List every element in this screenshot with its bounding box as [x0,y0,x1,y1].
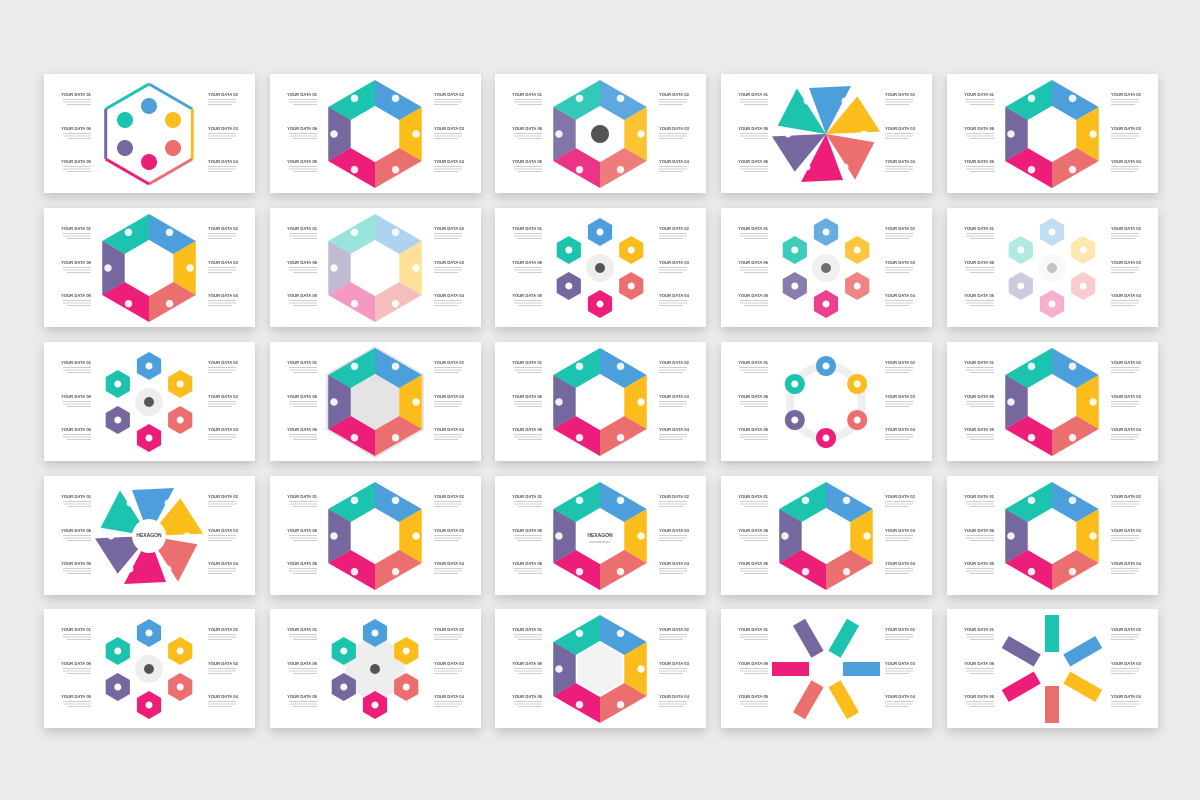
slide 19: hexagon ring [721,476,932,595]
slide 18: puzzle hexagon: HEXAGON [587,533,613,539]
slide 8: hexagon cells: YOUR DATA 01 [512,226,543,231]
slide 21: hexagon cells: YOUR DATA 01 [61,627,92,632]
slide 8: hexagon cells: YOUR DATA 03 [659,260,690,265]
slide 19: hexagon ring: YOUR DATA 04 [885,561,916,566]
slide 16: pinwheel hexagon title: YOUR DATA 02 [208,494,239,499]
slide 25: radiating tabs: YOUR DATA 03 [1111,661,1142,666]
slide 8: hexagon cells: YOUR DATA 04 [659,293,690,298]
slide 20: hexagon ring: YOUR DATA 01 [964,494,995,499]
slide 13: hexagon ring arrows: YOUR DATA 03 [659,394,690,399]
slide 3: split hexagon: YOUR DATA 03 [659,126,690,131]
slide 13: hexagon ring arrows [495,342,706,461]
slide 24: rounded bars: YOUR DATA 06 [738,661,769,666]
slide 7: brush hexagon: YOUR DATA 05 [287,293,318,298]
slide 25: radiating tabs: YOUR DATA 01 [964,627,995,632]
slide 7: brush hexagon: YOUR DATA 03 [434,260,465,265]
slide 3: split hexagon: YOUR DATA 02 [659,92,690,97]
slide 15: hexagon ring with arrows: YOUR DATA 05 [964,427,995,432]
slide 10: light hexagon cells [947,208,1158,327]
slide 5: hexagon ring: YOUR DATA 05 [964,159,995,164]
slide 13: hexagon ring arrows: YOUR DATA 06 [512,394,543,399]
slide 8: hexagon cells [495,208,706,327]
slide 23: solid hexagon triangles: YOUR DATA 05 [512,694,543,699]
slide 12: hexagon ring in gray frame: YOUR DATA 04 [434,427,465,432]
slide 9: hexagon with sample text: YOUR DATA 01 [738,226,769,231]
slide 19: hexagon ring: YOUR DATA 03 [885,528,916,533]
slide 10: light hexagon cells: YOUR DATA 06 [964,260,995,265]
slide 21: hexagon cells: YOUR DATA 02 [208,627,239,632]
slide 16: pinwheel hexagon title: YOUR DATA 01 [61,494,92,499]
slide 14: ring circles: YOUR DATA 03 [885,394,916,399]
slide 5: hexagon ring: YOUR DATA 01 [964,92,995,97]
slide 5: hexagon ring [947,74,1158,193]
slide 11: 3D hexagon cells: YOUR DATA 03 [208,394,239,399]
slide 10: light hexagon cells: YOUR DATA 05 [964,293,995,298]
slide 13: hexagon ring arrows: YOUR DATA 01 [512,360,543,365]
slide 3: split hexagon [495,74,706,193]
slide 25: radiating tabs: YOUR DATA 05 [964,694,995,699]
slide 19: hexagon ring: YOUR DATA 05 [738,561,769,566]
slide 23: solid hexagon triangles: YOUR DATA 06 [512,661,543,666]
slide 22: hexagon cells with gray center: YOUR DATA 01 [287,627,318,632]
slide 7: brush hexagon [270,208,481,327]
slide 17: ribbon hexagon [270,476,481,595]
slide 25: radiating tabs: YOUR DATA 06 [964,661,995,666]
slide 18: puzzle hexagon [495,476,706,595]
slide 21: hexagon cells: YOUR DATA 04 [208,694,239,699]
slide 14: ring circles: YOUR DATA 02 [885,360,916,365]
slide 25: radiating tabs: YOUR DATA 04 [1111,694,1142,699]
slide 3: split hexagon: YOUR DATA 01 [512,92,543,97]
slide 24: rounded bars: YOUR DATA 03 [885,661,916,666]
slide 4: pinwheel: YOUR DATA 02 [885,92,916,97]
slide 20: hexagon ring: YOUR DATA 06 [964,528,995,533]
slide 16: pinwheel hexagon title: YOUR DATA 05 [61,561,92,566]
slide 1: outline hexagon with circles: YOUR DATA 05 [61,159,92,164]
slide 20: hexagon ring: YOUR DATA 04 [1111,561,1142,566]
slide 4: pinwheel: YOUR DATA 03 [885,126,916,131]
slide 16: pinwheel hexagon title: YOUR DATA 04 [208,561,239,566]
slide 23: solid hexagon triangles: YOUR DATA 03 [659,661,690,666]
slide 24: rounded bars: YOUR DATA 01 [738,627,769,632]
slide 16: pinwheel hexagon title [44,476,255,595]
slide 18: puzzle hexagon: YOUR DATA 05 [512,561,543,566]
slide 22: hexagon cells with gray center [270,609,481,728]
slide 4: pinwheel: YOUR DATA 05 [738,159,769,164]
slide 16: pinwheel hexagon title: YOUR DATA 06 [61,528,92,533]
slide 6: hexagon ring [44,208,255,327]
slide 11: 3D hexagon cells: YOUR DATA 05 [61,427,92,432]
slide 22: hexagon cells with gray center: YOUR DATA 03 [434,661,465,666]
slide 24: rounded bars: YOUR DATA 02 [885,627,916,632]
slide 1: outline hexagon with circles: YOUR DATA 01 [61,92,92,97]
slide 23: solid hexagon triangles: YOUR DATA 04 [659,694,690,699]
slide 23: solid hexagon triangles: YOUR DATA 02 [659,627,690,632]
slide 23: solid hexagon triangles [495,609,706,728]
slide 14: ring circles: YOUR DATA 06 [738,394,769,399]
slide 14: ring circles [721,342,932,461]
slide 6: hexagon ring: YOUR DATA 03 [208,260,239,265]
slide 24: rounded bars: YOUR DATA 05 [738,694,769,699]
slide 6: hexagon ring: YOUR DATA 01 [61,226,92,231]
slide 11: 3D hexagon cells: YOUR DATA 02 [208,360,239,365]
slide 18: puzzle hexagon: INFOGRAPHIC [590,540,611,544]
slide 13: hexagon ring arrows: YOUR DATA 05 [512,427,543,432]
slide 9: hexagon with sample text: YOUR DATA 02 [885,226,916,231]
slide 4: pinwheel [721,74,932,193]
slide 8: hexagon cells: YOUR DATA 06 [512,260,543,265]
slide 12: hexagon ring in gray frame: YOUR DATA 02 [434,360,465,365]
slide 20: hexagon ring: YOUR DATA 03 [1111,528,1142,533]
slide 9: hexagon with sample text: YOUR DATA 05 [738,293,769,298]
slide 17: ribbon hexagon: YOUR DATA 02 [434,494,465,499]
slide 14: ring circles: YOUR DATA 05 [738,427,769,432]
slide 13: hexagon ring arrows: YOUR DATA 02 [659,360,690,365]
slide 17: ribbon hexagon: YOUR DATA 06 [287,528,318,533]
slide 15: hexagon ring with arrows: YOUR DATA 06 [964,394,995,399]
slide 18: puzzle hexagon: YOUR DATA 01 [512,494,543,499]
slide 19: hexagon ring: YOUR DATA 01 [738,494,769,499]
slide 1: outline hexagon with circles: YOUR DATA 06 [61,126,92,131]
slide 18: puzzle hexagon: YOUR DATA 02 [659,494,690,499]
slide 9: hexagon with sample text [721,208,932,327]
slide 15: hexagon ring with arrows: YOUR DATA 02 [1111,360,1142,365]
slide 11: 3D hexagon cells: YOUR DATA 01 [61,360,92,365]
slide 15: hexagon ring with arrows [947,342,1158,461]
slide 7: brush hexagon: YOUR DATA 04 [434,293,465,298]
slide 21: hexagon cells: YOUR DATA 03 [208,661,239,666]
slide 12: hexagon ring in gray frame [270,342,481,461]
slide 25: radiating tabs: YOUR DATA 02 [1111,627,1142,632]
slide 7: brush hexagon: YOUR DATA 02 [434,226,465,231]
slide 2: hexagon ring with icon circles: YOUR DATA 02 [434,92,465,97]
slide 2: hexagon ring with icon circles: YOUR DATA 04 [434,159,465,164]
slide 12: hexagon ring in gray frame: YOUR DATA 06 [287,394,318,399]
slide 6: hexagon ring: YOUR DATA 02 [208,226,239,231]
slide 2: hexagon ring with icon circles: YOUR DATA 01 [287,92,318,97]
slide 7: brush hexagon: YOUR DATA 06 [287,260,318,265]
slide 1: outline hexagon with circles: YOUR DATA 02 [208,92,239,97]
slide 1: outline hexagon with circles [44,74,255,193]
slide 25: radiating tabs [947,609,1158,728]
slide 2: hexagon ring with icon circles: YOUR DATA 05 [287,159,318,164]
slide 1: outline hexagon with circles: YOUR DATA 03 [208,126,239,131]
slide 17: ribbon hexagon: YOUR DATA 05 [287,561,318,566]
slide 2: hexagon ring with icon circles: YOUR DATA 03 [434,126,465,131]
slide 6: hexagon ring: YOUR DATA 05 [61,293,92,298]
slide 10: light hexagon cells: YOUR DATA 04 [1111,293,1142,298]
slide 12: hexagon ring in gray frame: YOUR DATA 03 [434,394,465,399]
slide 3: split hexagon: YOUR DATA 04 [659,159,690,164]
slide 5: hexagon ring: YOUR DATA 03 [1111,126,1142,131]
slide 4: pinwheel: YOUR DATA 01 [738,92,769,97]
slide 14: ring circles: YOUR DATA 04 [885,427,916,432]
slide 21: hexagon cells: YOUR DATA 05 [61,694,92,699]
slide 18: puzzle hexagon: YOUR DATA 04 [659,561,690,566]
slide 10: light hexagon cells: YOUR DATA 03 [1111,260,1142,265]
slide 21: hexagon cells [44,609,255,728]
slide 21: hexagon cells: YOUR DATA 06 [61,661,92,666]
slide 12: hexagon ring in gray frame: YOUR DATA 05 [287,427,318,432]
slide 19: hexagon ring: YOUR DATA 02 [885,494,916,499]
slide 7: brush hexagon: YOUR DATA 01 [287,226,318,231]
slide 22: hexagon cells with gray center: YOUR DATA 05 [287,694,318,699]
slide 18: puzzle hexagon: YOUR DATA 03 [659,528,690,533]
slide 5: hexagon ring: YOUR DATA 02 [1111,92,1142,97]
slide 23: solid hexagon triangles: YOUR DATA 01 [512,627,543,632]
slide 19: hexagon ring: YOUR DATA 06 [738,528,769,533]
slide 24: rounded bars [721,609,932,728]
slide 16: pinwheel hexagon title: YOUR DATA 03 [208,528,239,533]
slide 10: light hexagon cells: YOUR DATA 02 [1111,226,1142,231]
slide 10: light hexagon cells: YOUR DATA 01 [964,226,995,231]
slide 14: ring circles: YOUR DATA 01 [738,360,769,365]
slide 6: hexagon ring: YOUR DATA 06 [61,260,92,265]
slide 3: split hexagon: YOUR DATA 06 [512,126,543,131]
slide 4: pinwheel: YOUR DATA 04 [885,159,916,164]
slide 15: hexagon ring with arrows: YOUR DATA 03 [1111,394,1142,399]
slide 9: hexagon with sample text: YOUR DATA 04 [885,293,916,298]
slide 9: hexagon with sample text: YOUR DATA 03 [885,260,916,265]
slide 15: hexagon ring with arrows: YOUR DATA 04 [1111,427,1142,432]
slide 16: pinwheel hexagon title: HEXAGON [136,533,162,539]
slide 9: hexagon with sample text: YOUR DATA 06 [738,260,769,265]
slide 20: hexagon ring: YOUR DATA 02 [1111,494,1142,499]
slide 6: hexagon ring: YOUR DATA 04 [208,293,239,298]
slide 11: 3D hexagon cells: YOUR DATA 06 [61,394,92,399]
slide 8: hexagon cells: YOUR DATA 02 [659,226,690,231]
slide 12: hexagon ring in gray frame: YOUR DATA 01 [287,360,318,365]
slide 13: hexagon ring arrows: YOUR DATA 04 [659,427,690,432]
slide 24: rounded bars: YOUR DATA 04 [885,694,916,699]
slide 22: hexagon cells with gray center: YOUR DATA 04 [434,694,465,699]
slide 5: hexagon ring: YOUR DATA 04 [1111,159,1142,164]
slide 4: pinwheel: YOUR DATA 06 [738,126,769,131]
slide 11: 3D hexagon cells: YOUR DATA 04 [208,427,239,432]
slide 20: hexagon ring [947,476,1158,595]
slide 20: hexagon ring: YOUR DATA 05 [964,561,995,566]
slide 15: hexagon ring with arrows: YOUR DATA 01 [964,360,995,365]
slide 17: ribbon hexagon: YOUR DATA 04 [434,561,465,566]
slide 18: puzzle hexagon: YOUR DATA 06 [512,528,543,533]
slide 22: hexagon cells with gray center: YOUR DATA 02 [434,627,465,632]
slide 17: ribbon hexagon: YOUR DATA 01 [287,494,318,499]
slide 1: outline hexagon with circles: YOUR DATA 04 [208,159,239,164]
slide 5: hexagon ring: YOUR DATA 06 [964,126,995,131]
slide 11: 3D hexagon cells [44,342,255,461]
slide 3: split hexagon: YOUR DATA 05 [512,159,543,164]
slide 17: ribbon hexagon: YOUR DATA 03 [434,528,465,533]
slide 2: hexagon ring with icon circles: YOUR DATA 06 [287,126,318,131]
slide 2: hexagon ring with icon circles [270,74,481,193]
slide 8: hexagon cells: YOUR DATA 05 [512,293,543,298]
slide 22: hexagon cells with gray center: YOUR DATA 06 [287,661,318,666]
